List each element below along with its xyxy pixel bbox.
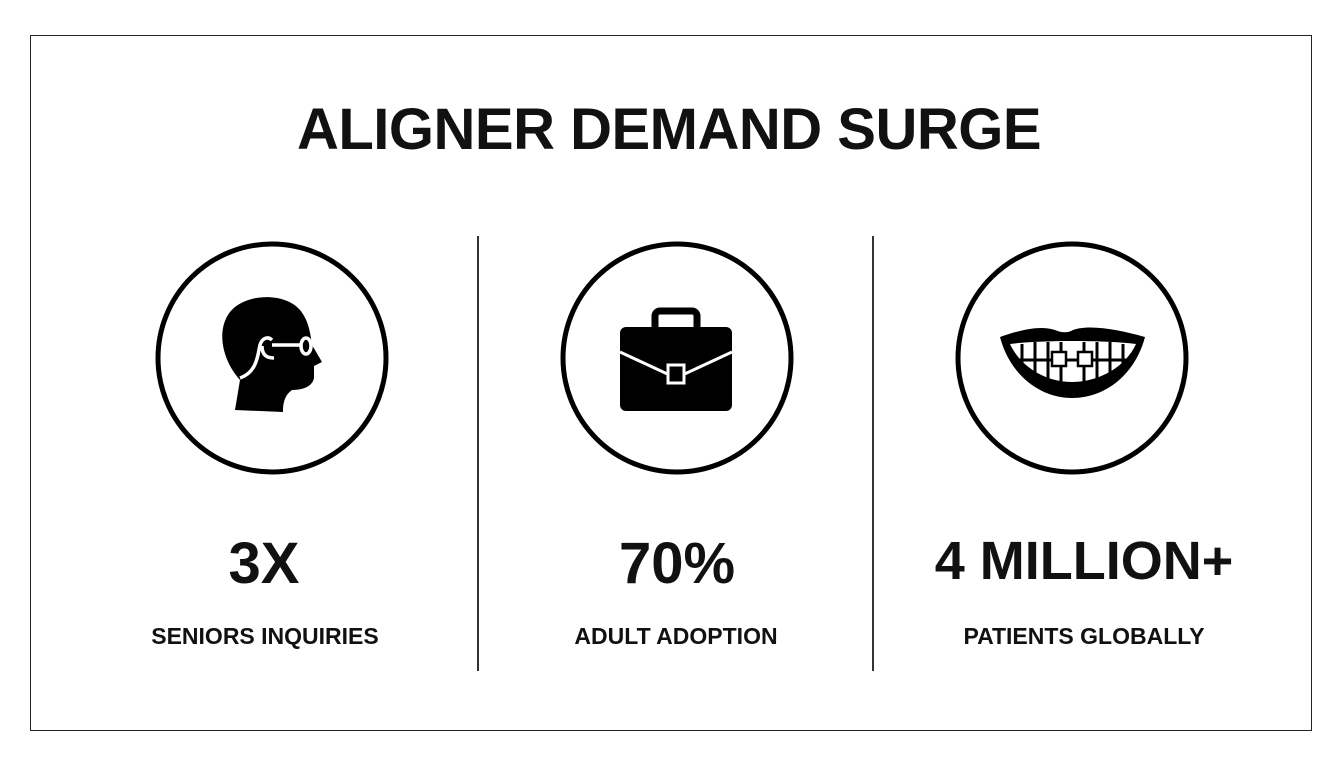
stat 2: 70%: [619, 531, 735, 596]
icon: senior head: [158, 244, 386, 472]
label 3: PATIENTS GLOBALLY: [963, 623, 1205, 649]
stat 1: 3X: [229, 531, 299, 596]
icon: smile with braces: [958, 244, 1186, 472]
title: ALIGNER DEMAND SURGE: [297, 97, 1041, 162]
icon: briefcase: [563, 244, 791, 472]
stat 3: 4 MILLION+: [935, 531, 1233, 591]
label 1: SENIORS INQUIRIES: [151, 623, 379, 649]
label 2: ADULT ADOPTION: [574, 623, 778, 649]
